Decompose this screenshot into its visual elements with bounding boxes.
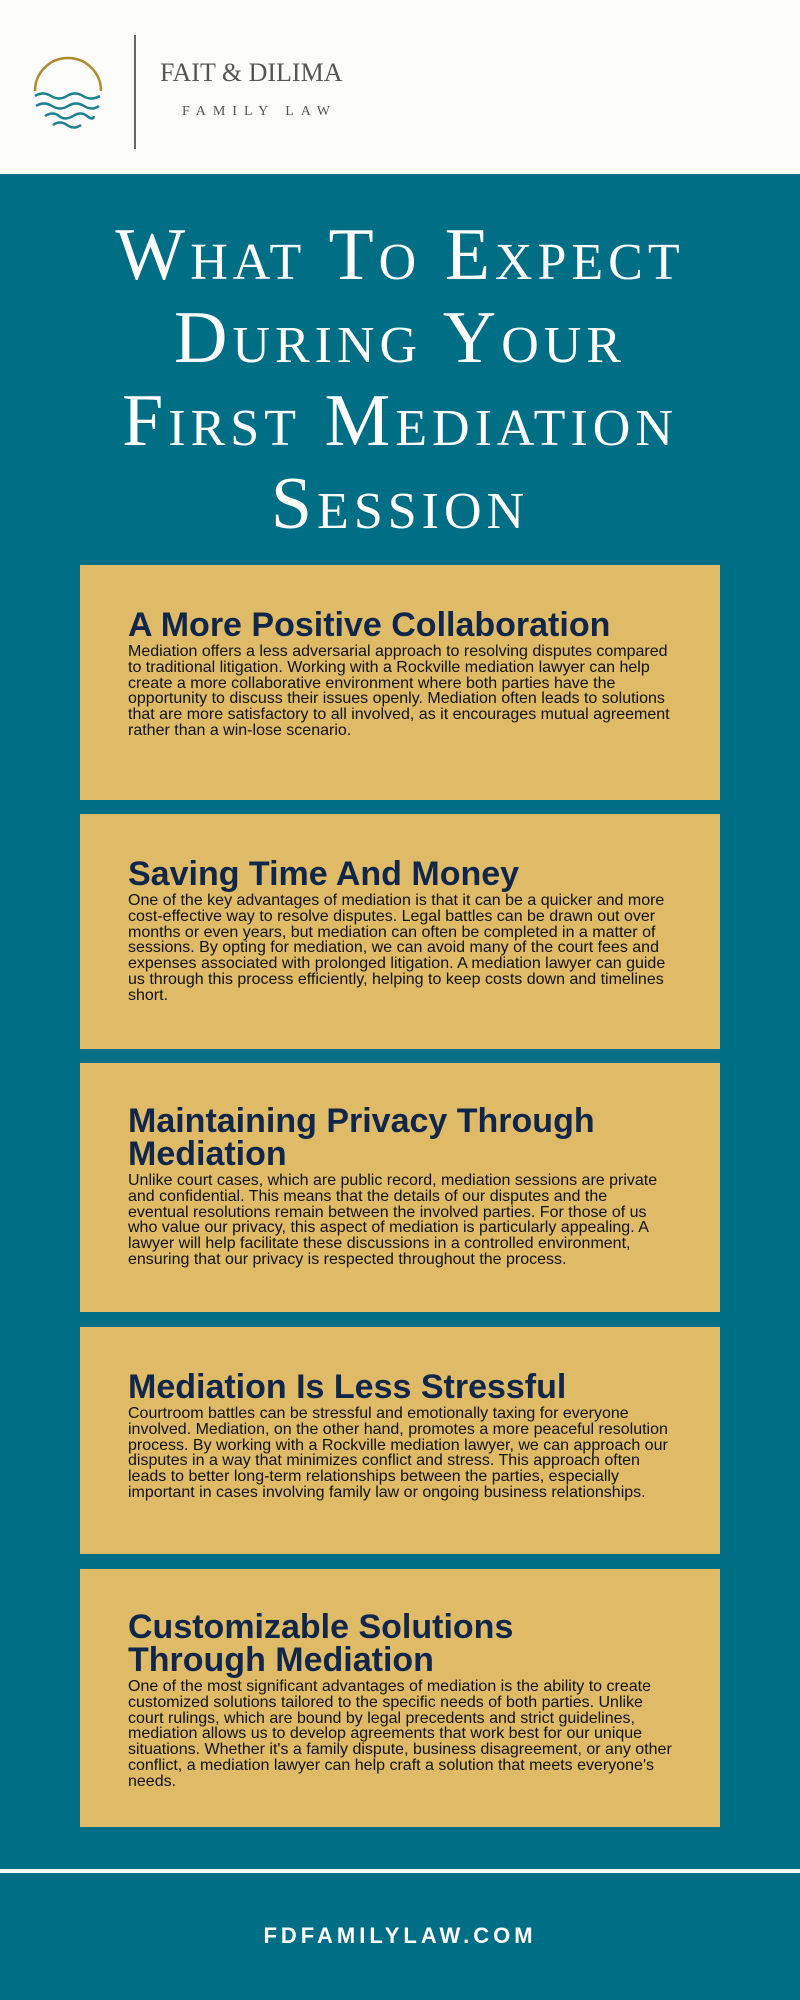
panel: customizable solutions: Through Mediation — [128, 1641, 434, 1679]
panel: saving time and money: Saving Time And Money — [128, 855, 519, 893]
panel: customizable solutions: One of the most significant advantages of mediation is the ability to create customized solutions tailored to the specific needs of both parties. Unlike court rulings, which are bound by legal precedents and strict guidelines, mediation allows us to develop agreements that work best for our unique situations. Whether it's a family dispute, business disagreement, or any other conflict, a mediation lawyer can help craft a solution that meets everyone's needs. — [128, 1678, 672, 1790]
panel: less stressful: Courtroom battles can be stressful and emotionally taxing for everyone involved. Mediation, on the other hand, promotes a more peaceful resolution process. By working with a Rockville mediation lawyer, we can approach our disputes in a way that minimizes conflict and stress. This approach often leads to better long-term relationships between the parties, especially important in cases involving family law or ongoing business relationships. — [128, 1405, 668, 1501]
title: During Your — [174, 297, 626, 379]
panel: less stressful: Mediation Is Less Stressful — [128, 1368, 566, 1406]
panel: positive collaboration — [80, 565, 720, 800]
panel: privacy: Unlike court cases, which are public record, mediation sessions are private and confidential. This means that the details of our disputes and the eventual resolutions remain between the involved parties. For those of us who value our privacy, this aspect of mediation is particularly appealing. A lawyer will help facilitate these discussions in a controlled environment, ensuring that our privacy is respected throughout the process. — [128, 1172, 657, 1268]
title: First Mediation — [122, 380, 678, 462]
panel: less stressful — [80, 1327, 720, 1554]
footer url: FDFAMILYLAW.COM — [263, 1923, 537, 1948]
panel: saving time and money — [80, 814, 720, 1049]
panel: privacy — [80, 1063, 720, 1312]
panel: customizable solutions: Customizable Solutions — [128, 1608, 513, 1646]
title — [115, 214, 685, 545]
header — [0, 0, 800, 174]
footer divider — [0, 1869, 800, 1873]
brand subtitle: FAMILY LAW — [182, 104, 337, 119]
icon: logo sun and waves — [34, 56, 102, 129]
panel: positive collaboration: A More Positive Collaboration — [128, 606, 610, 644]
panel: customizable solutions — [80, 1569, 720, 1827]
brand name: FAIT & DILIMA — [160, 58, 342, 87]
title: Session — [271, 463, 529, 545]
divider — [134, 35, 136, 149]
panel: saving time and money: One of the key advantages of mediation is that it can be a quicker and more cost-effective way to resolve disputes. Legal battles can be drawn out over months or even years, but mediation can often be completed in a matter of sessions. By opting for mediation, we can avoid many of the court fees and expenses associated with prolonged litigation. A mediation lawyer can guide us through this process efficiently, helping to keep costs down and timelines short. — [128, 892, 665, 1004]
panel: positive collaboration: Mediation offers a less adversarial approach to resolving disputes compared to traditional litigation. Working with a Rockville mediation lawyer can help create a more collaborative environment where both parties have the opportunity to discuss their issues openly. Mediation often leads to solutions that are more satisfactory to all involved, as it encourages mutual agreement rather than a win-lose scenario. — [128, 643, 670, 739]
title: What To Expect — [115, 214, 685, 296]
panel: privacy: Maintaining Privacy Through Mediation — [128, 1102, 595, 1173]
